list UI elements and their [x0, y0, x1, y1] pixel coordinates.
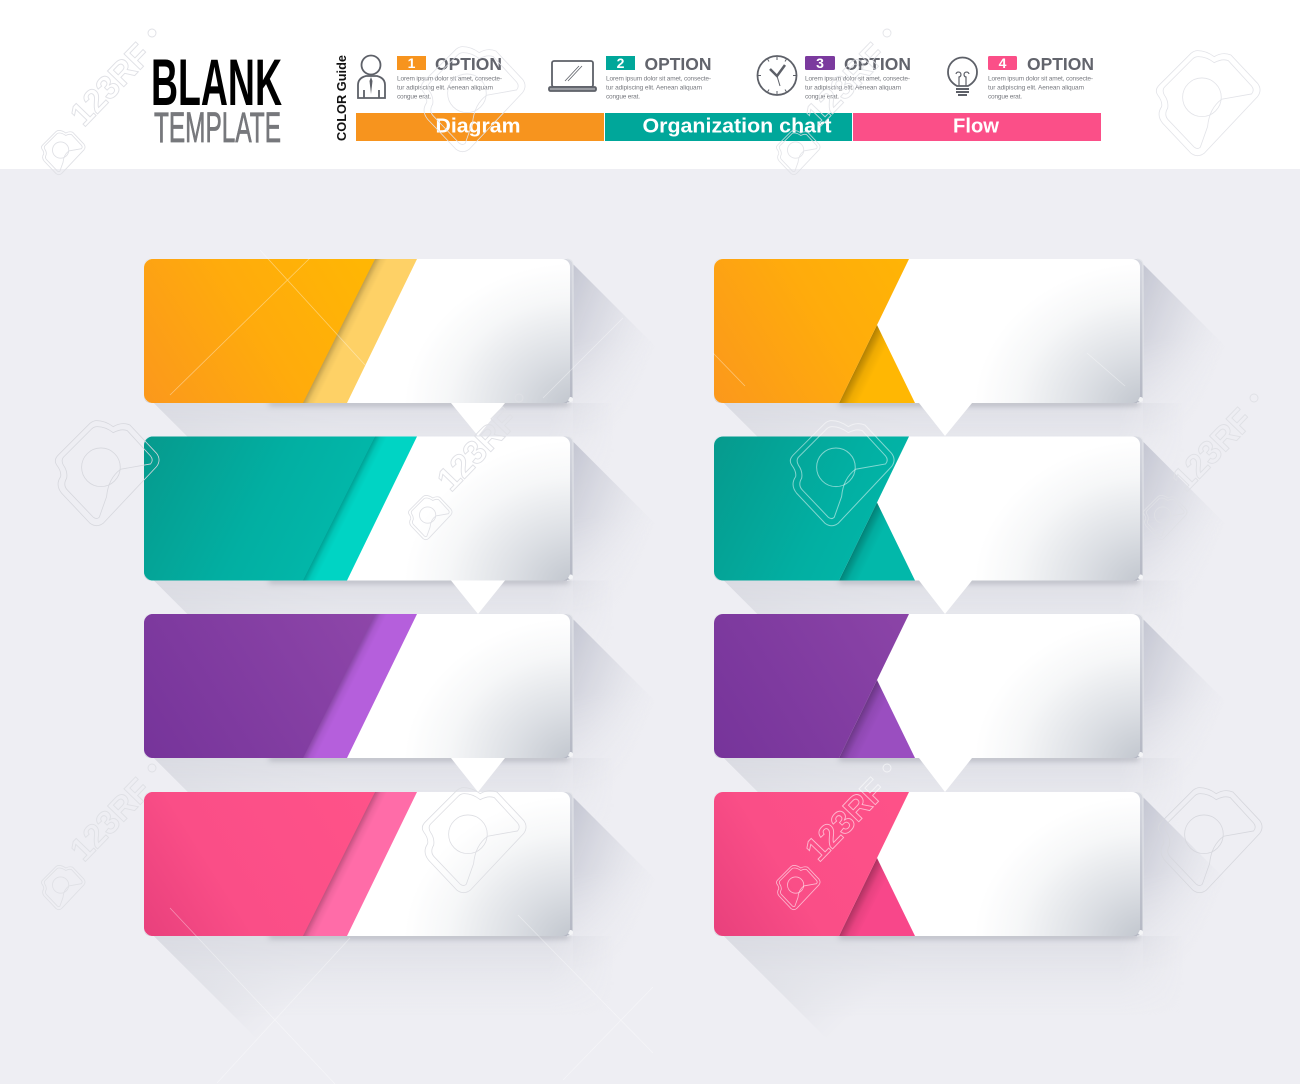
title: TEMPLATE [154, 104, 281, 152]
watermark mark 4 [1143, 394, 1260, 540]
description 1: Lorem ipsum dolor sit amet, consecte- [397, 76, 502, 82]
option 2 [549, 54, 712, 100]
watermark stamp 2 [1156, 51, 1260, 156]
arrows between cards: left column [451, 403, 505, 792]
category bar: Organization chart: Organization chart [642, 114, 832, 138]
badge 3: 3 [816, 55, 824, 71]
watermark mark 5: 123RF [62, 771, 158, 868]
category bar: Diagram [356, 113, 604, 141]
long shadows: right column [724, 264, 1254, 1041]
category bar: Flow [853, 113, 1101, 141]
option 4 [948, 54, 1094, 100]
watermark mark 5 [41, 764, 158, 910]
icon: light bulb [948, 57, 977, 95]
long shadows: left column [154, 264, 684, 1041]
badge 2: 2 [617, 55, 625, 71]
category bar: Diagram: Diagram [436, 114, 520, 138]
watermark [41, 29, 1262, 910]
color guide label: COLOR Guide [335, 55, 349, 141]
option heading 2: OPTION [644, 54, 712, 74]
description 4: Lorem ipsum dolor sit amet, consecte- [988, 76, 1093, 82]
option 3 [758, 54, 911, 100]
option 1 [358, 54, 502, 100]
panel: left card 1 orange [144, 259, 573, 403]
description 2 [606, 76, 711, 100]
badge 1 [397, 55, 426, 71]
arrows between cards: right column [919, 403, 972, 792]
watermark hairlines [170, 250, 1125, 1084]
panel: left card 4 pink [144, 792, 573, 936]
badge 2 [606, 55, 635, 71]
badge 3 [805, 55, 835, 71]
panel: left card 3 purple [144, 614, 573, 758]
watermark stamp 1 [421, 47, 525, 152]
badge 4 [988, 55, 1017, 71]
watermark mark 1 [41, 29, 158, 175]
description 1 [397, 76, 502, 100]
description 4: tur adipiscing elit. Aenean aliquam [988, 84, 1084, 92]
watermark mark 2: 123RF [429, 401, 525, 498]
watermark stamp 5 [422, 788, 526, 893]
option heading 3: OPTION [844, 54, 911, 74]
watermark stamp 4 [790, 421, 894, 526]
option heading 1: OPTION [435, 54, 502, 74]
panel: right card 3 purple [714, 614, 1143, 758]
description 1: congue erat. [397, 94, 431, 100]
panel: right card 2 teal [714, 436, 1143, 580]
description 2: congue erat. [606, 94, 640, 100]
option heading 4: OPTION [1027, 54, 1094, 74]
watermark mark 3 [776, 29, 893, 175]
category bar: Organization chart [605, 113, 852, 141]
description 1: tur adipiscing elit. Aenean aliquam [397, 84, 493, 92]
badge 1: 1 [408, 55, 416, 71]
description 4: congue erat. [988, 94, 1022, 100]
panel: right card 4 pink [714, 792, 1143, 936]
description 3 [805, 76, 910, 100]
title: BLANK [151, 45, 282, 119]
description 3: tur adipiscing elit. Aenean aliquam [805, 84, 901, 92]
description 4 [988, 76, 1093, 100]
description 2: Lorem ipsum dolor sit amet, consecte- [606, 76, 711, 82]
watermark stamp 3 [55, 421, 159, 526]
header band [0, 0, 1300, 169]
watermark mark 1: 123RF [62, 36, 158, 133]
icon: clock [758, 56, 796, 95]
category bar: Flow: Flow [953, 114, 999, 138]
panel: left card 2 teal [144, 436, 573, 580]
icon: person [358, 56, 385, 98]
watermark mark 2 [408, 394, 525, 540]
description 2: tur adipiscing elit. Aenean aliquam [606, 84, 702, 92]
watermark mark 4: 123RF [1164, 401, 1260, 498]
description 3: Lorem ipsum dolor sit amet, consecte- [805, 76, 910, 82]
watermark stamp 6 [1158, 788, 1262, 893]
watermark mark 6: 123RF [797, 771, 893, 868]
panel: right card 1 orange [714, 259, 1143, 403]
watermark mark 3: 123RF [797, 36, 893, 133]
badge 4: 4 [999, 55, 1007, 71]
description 3: congue erat. [805, 94, 839, 100]
icon: laptop [549, 61, 596, 91]
watermark mark 6 [776, 764, 893, 910]
title [151, 45, 282, 152]
